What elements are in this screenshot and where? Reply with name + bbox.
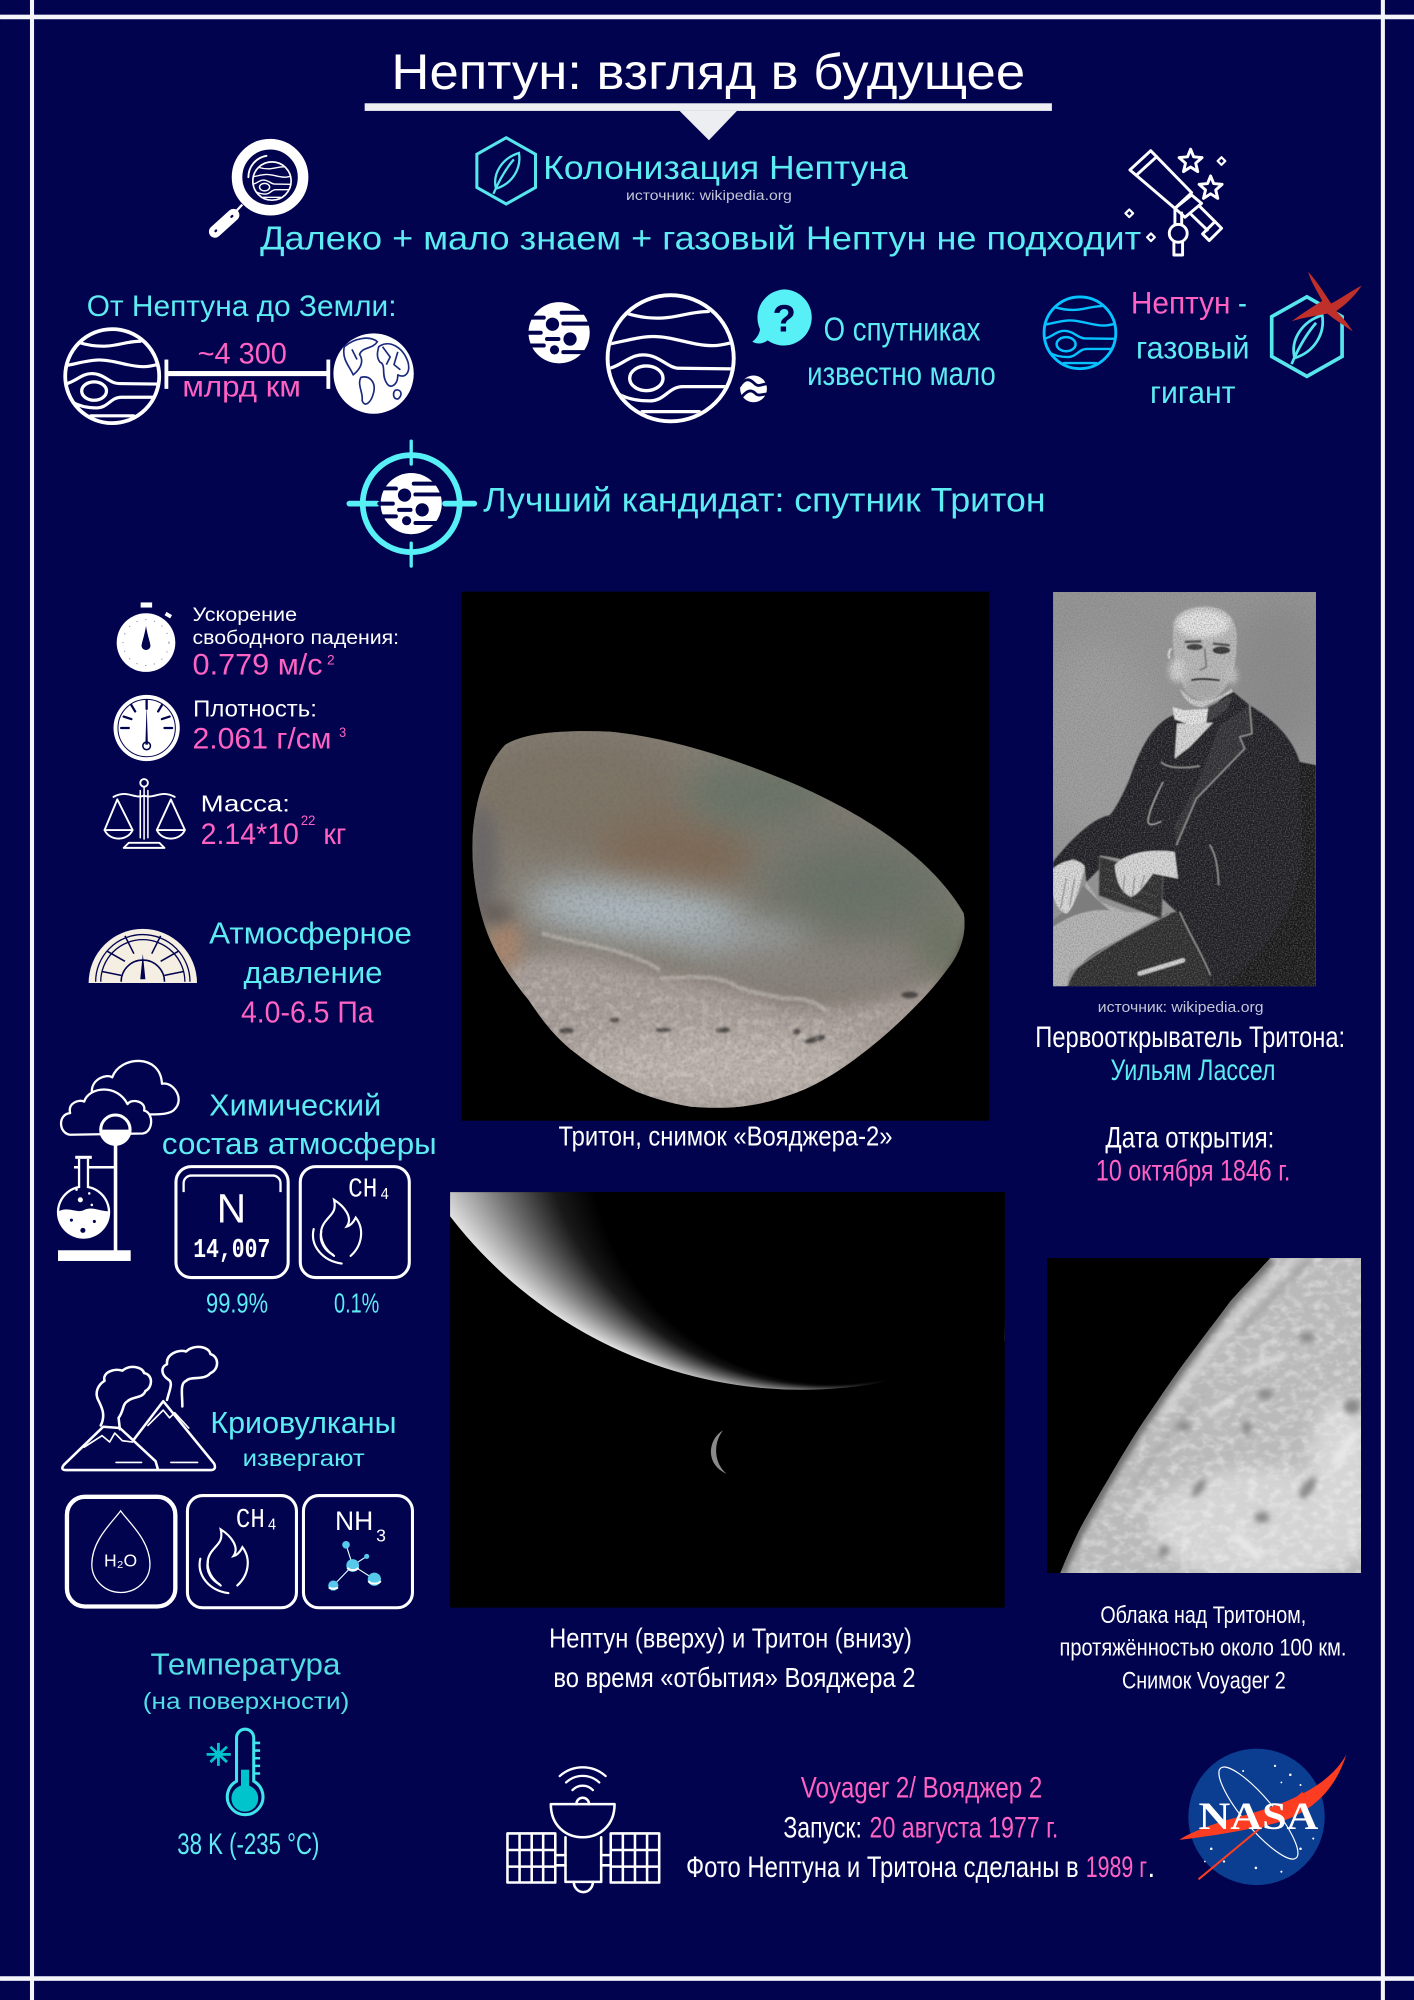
heading: distance: От Нептуна до Земли: — [87, 290, 397, 323]
text: atmospheric pressure: давление — [244, 956, 383, 990]
text: gas giant — [1131, 285, 1250, 410]
caption: clouds: протяжённостью около 100 км. — [1060, 1635, 1346, 1662]
icon: moon large-left — [527, 302, 591, 363]
text: mass: Масса: — [201, 791, 290, 817]
card: nitrogen: 14,007 — [193, 1236, 270, 1266]
heading: best candidate: Лучший кандидат: спутник Тритон — [483, 481, 1046, 519]
icon: Neptune center — [608, 295, 734, 421]
text: atmosphere composition: Химический — [209, 1089, 381, 1123]
text: cryovolcanoes: извергают — [243, 1445, 365, 1471]
icon: question bubble: ? — [772, 297, 796, 340]
card: methane emission: CH₄ — [236, 1506, 279, 1536]
text: moons little known: О спутниках — [824, 311, 981, 348]
text: atmospheric pressure: 4.0-6.5 Па — [241, 996, 374, 1030]
caption: Triton: Тритон, снимок «Вояджера-2» — [558, 1121, 893, 1152]
text: mass: 22 — [301, 812, 316, 828]
icon: blue Neptune — [1044, 297, 1116, 369]
caption: clouds: Облака над Тритоном, — [1100, 1602, 1306, 1629]
text: gravity: Ускорение — [193, 605, 297, 626]
icon: stopwatch — [117, 602, 175, 672]
text: Voyager 2 facts: Voyager 2/ Вояджер 2 — [801, 1772, 1042, 1805]
text: mass — [201, 791, 346, 851]
heading: colonization: Колонизация Нептуна — [543, 150, 908, 187]
text: Voyager 2 facts: . — [1148, 1851, 1155, 1884]
text: Voyager 2 facts: Запуск: — [783, 1811, 862, 1844]
text: density: 2.061 г/см — [193, 722, 332, 755]
icon: telescope and stars — [1125, 149, 1225, 255]
text: density — [193, 696, 346, 755]
text: gas giant: газовый — [1136, 329, 1250, 365]
distance value: ~4 300 — [198, 337, 287, 370]
icon: tiny moon — [740, 375, 768, 402]
title pointer bar — [365, 103, 1052, 140]
text: mass: кг — [323, 818, 346, 851]
text: density: 3 — [339, 724, 346, 740]
icon: magnifier with planet — [215, 144, 303, 232]
card: methane — [300, 1167, 409, 1278]
text: gravity — [193, 605, 399, 681]
icon: thermometer and snowflake — [207, 1729, 263, 1815]
value: nitrogen percent: 99.9% — [206, 1288, 268, 1319]
caption: clouds: Снимок Voyager 2 — [1122, 1668, 1286, 1695]
card: water: H₂O — [104, 1550, 137, 1570]
icon: clouds and flask — [58, 1061, 179, 1261]
distance unit: млрд км — [182, 371, 301, 404]
icon: crossed-out leaf hexagon — [1272, 272, 1362, 376]
icon: density gauge — [113, 695, 180, 761]
text: mass: 2.14*10 — [201, 818, 299, 851]
text: atmospheric pressure: Атмосферное — [209, 916, 412, 950]
text: gravity: 2 — [327, 651, 335, 667]
icon: Neptune left — [65, 329, 159, 423]
title: Нептун: взгляд в будущее — [391, 44, 1025, 100]
card: methane emission — [187, 1496, 296, 1608]
card: methane: CH₄ — [348, 1176, 392, 1206]
text: cryovolcanoes — [210, 1406, 397, 1471]
text: temperature heading: (на поверхности) — [143, 1688, 349, 1714]
caption: Neptune and Triton: Нептун (вверху) и Тритон (внизу) — [549, 1622, 912, 1653]
text: discovery date — [1096, 1121, 1290, 1188]
conclusion line: Далеко + мало знаем + газовый Нептун не подходит — [260, 220, 1141, 257]
value: methane percent: 0.1% — [334, 1288, 379, 1319]
text: gravity: 0.779 м/с — [193, 648, 323, 681]
icon: NASA logo — [1179, 1749, 1346, 1885]
icon: half pressure gauge — [89, 929, 197, 983]
caption: Neptune and Triton: во время «отбытия» Вояджера 2 — [553, 1662, 915, 1693]
source note: portrait: источник: wikipedia.org — [1098, 1000, 1264, 1016]
card: ammonia — [303, 1496, 412, 1608]
text: discoverer — [1035, 1021, 1345, 1087]
text: atmosphere composition: состав атмосферы — [162, 1127, 437, 1161]
text: Voyager 2 facts: 1989 г — [1086, 1851, 1147, 1884]
text: discoverer: Уильям Лассел — [1111, 1054, 1276, 1087]
icon: hexagon leaf — [477, 138, 536, 204]
photo: Neptune and Triton crescents — [450, 1192, 1005, 1608]
text: discovery date: 10 октября 1846 г. — [1096, 1155, 1290, 1188]
text: cryovolcanoes: Криовулканы — [210, 1406, 397, 1440]
icon: Earth — [333, 333, 414, 414]
text: temperature heading — [143, 1648, 349, 1714]
text: atmospheric pressure — [209, 916, 412, 1030]
card: water — [67, 1497, 175, 1606]
text: gas giant: гигант — [1150, 374, 1236, 410]
text: Voyager 2 facts: 20 августа 1977 г. — [870, 1811, 1058, 1844]
photo: clouds over Triton — [1047, 1258, 1377, 1581]
text: density: Плотность: — [193, 696, 317, 722]
photo: William Lassell portrait — [1053, 592, 1316, 986]
source note: источник: wikipedia.org — [626, 187, 792, 203]
distance bar — [164, 360, 330, 389]
icon: balance scale — [105, 779, 185, 848]
caption: clouds — [1060, 1602, 1346, 1695]
text: gas giant: - — [1238, 285, 1247, 321]
text: discoverer: Первооткрыватель Тритона: — [1035, 1021, 1345, 1054]
card: nitrogen: N — [217, 1186, 246, 1232]
text: discovery date: Дата открытия: — [1105, 1121, 1274, 1154]
text: Voyager 2 facts: Фото Нептуна и Тритона сделаны в — [686, 1851, 1079, 1884]
card: ammonia: NH — [335, 1506, 373, 1536]
text: Voyager 2 facts — [686, 1772, 1155, 1884]
value: temperature: 38 K (-235 °C) — [177, 1828, 319, 1861]
text: gravity: свободного падения: — [193, 628, 399, 649]
text: moons little known — [807, 311, 996, 393]
icon: crosshair target moon — [349, 441, 474, 566]
text: moons little known: известно мало — [807, 356, 996, 393]
text: atmosphere composition — [162, 1089, 437, 1161]
text: gas giant: Нептун — [1131, 285, 1230, 321]
caption: Neptune and Triton — [549, 1622, 915, 1693]
photo: Triton — [461, 592, 989, 1121]
icon: NASA logo: NASA — [1199, 1794, 1319, 1838]
icon: satellite — [507, 1767, 659, 1892]
icon: question bubble — [752, 289, 812, 346]
card: nitrogen — [176, 1167, 288, 1278]
icon: cryovolcanoes — [62, 1347, 217, 1470]
card: ammonia: 3 — [376, 1525, 386, 1545]
text: temperature heading: Температура — [150, 1648, 340, 1682]
